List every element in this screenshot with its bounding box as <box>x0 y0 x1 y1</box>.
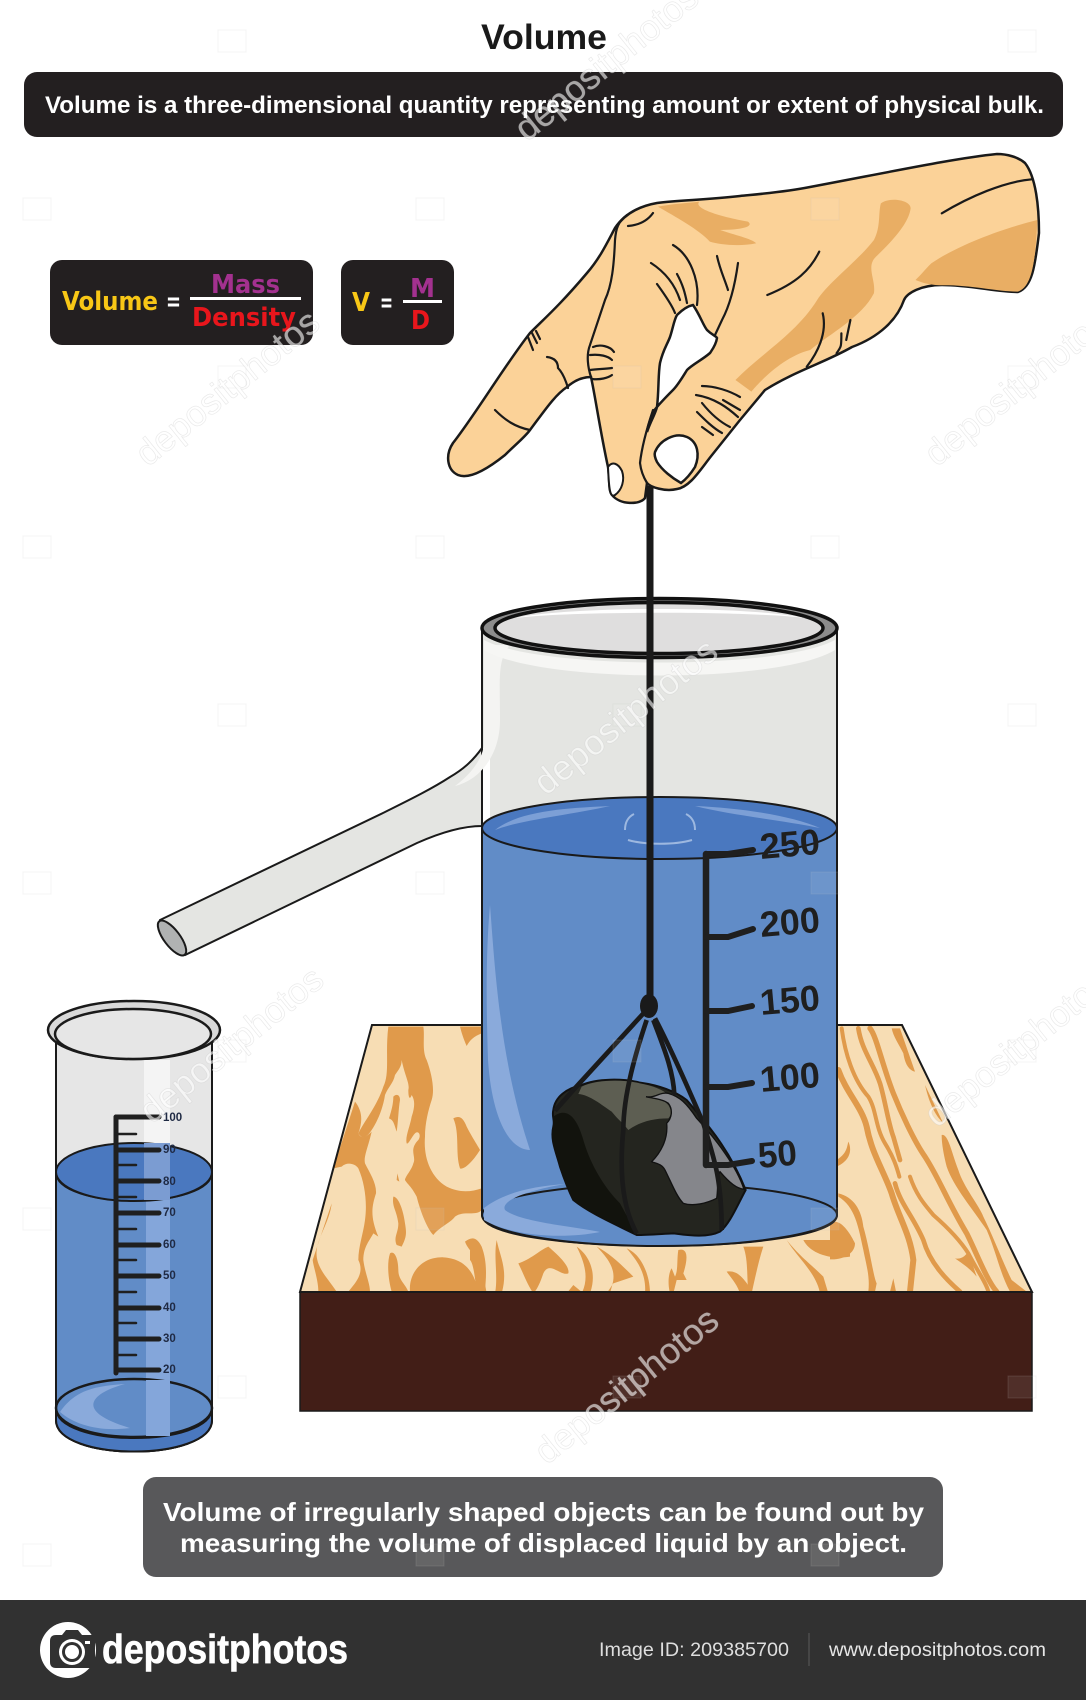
title: Volume <box>481 18 607 57</box>
formula box: V equals M over D: = <box>380 288 393 318</box>
logo wordmark: depositphotos <box>102 1626 348 1672</box>
liquid <box>56 1172 212 1452</box>
wooden table block <box>300 1025 1032 1411</box>
rock tied with string <box>552 994 746 1236</box>
cylinder rim <box>48 1001 220 1059</box>
formula box: V equals M over D: V <box>352 288 370 318</box>
scale numbers: 50 <box>756 1132 799 1176</box>
spout <box>160 748 482 955</box>
explanation note: measuring the volume of displaced liquid by an object. <box>180 1528 907 1558</box>
scale numbers: 150 <box>758 977 821 1023</box>
formula box: volume equals mass over density: Volume <box>62 287 158 317</box>
beaker bottom <box>482 1184 837 1246</box>
cylinder numbers: 70 <box>163 1207 176 1219</box>
cylinder numbers: 50 <box>163 1270 176 1282</box>
stock watermarks: depositphotos <box>525 630 725 803</box>
graduated scale <box>706 850 753 1165</box>
formula box: volume equals mass over density <box>50 260 313 345</box>
explanation note: Volume of irregularly shaped objects can be found out by <box>163 1497 925 1527</box>
stock watermarks: depositphotos <box>127 301 327 474</box>
cylinder numbers: 30 <box>163 1333 176 1345</box>
scale numbers <box>756 821 821 1176</box>
cylinder numbers: 40 <box>163 1302 176 1314</box>
string <box>646 486 654 1006</box>
middle fingernail <box>608 464 623 496</box>
scale numbers: 200 <box>758 899 821 945</box>
large beaker with overflow spout <box>153 486 837 1246</box>
definition banner: Volume is a three-dimensional quantity representing amount or extent of physical bulk. <box>45 92 1044 119</box>
footer bar <box>0 1600 1086 1700</box>
cylinder scale <box>116 1117 159 1373</box>
website url: www.depositphotos.com <box>828 1640 1046 1661</box>
explanation note <box>143 1477 943 1577</box>
cylinder numbers: 100 <box>163 1112 182 1124</box>
formula box: V equals M over D: D <box>411 306 430 336</box>
small measuring cylinder with collected liquid <box>48 1001 220 1452</box>
stock watermarks: depositphotos <box>526 1299 726 1472</box>
cylinder numbers <box>163 1112 182 1376</box>
hand shading <box>658 200 1037 392</box>
scale numbers: 100 <box>758 1054 821 1100</box>
gap between fingers <box>647 305 717 432</box>
rim of beaker <box>482 598 837 658</box>
finger creases and outlines <box>495 213 740 483</box>
hand holding string <box>448 154 1039 503</box>
water body <box>482 828 837 1246</box>
cylinder numbers: 80 <box>163 1176 176 1188</box>
formula box: volume equals mass over density: Density <box>192 303 296 333</box>
formula box: volume equals mass over density: = <box>166 287 181 317</box>
formula box: V equals M over D <box>341 260 454 345</box>
scale numbers: 250 <box>758 821 821 867</box>
definition banner <box>24 72 1063 137</box>
cylinder numbers: 60 <box>163 1239 176 1251</box>
table front face <box>300 1292 1032 1411</box>
right hand creases <box>767 179 1032 367</box>
formula box: volume equals mass over density: Mass <box>211 270 280 300</box>
formula box: V equals M over D: M <box>410 274 435 304</box>
image id: Image ID: 209385700 <box>599 1640 789 1661</box>
cylinder numbers: 90 <box>163 1144 176 1156</box>
stock watermarks: depositphotos <box>131 958 331 1131</box>
cylinder numbers: 20 <box>163 1364 176 1376</box>
logo icon: camera <box>40 1622 96 1678</box>
thumbnail <box>655 435 698 483</box>
water surface <box>482 797 837 859</box>
hand outline <box>448 154 1039 503</box>
